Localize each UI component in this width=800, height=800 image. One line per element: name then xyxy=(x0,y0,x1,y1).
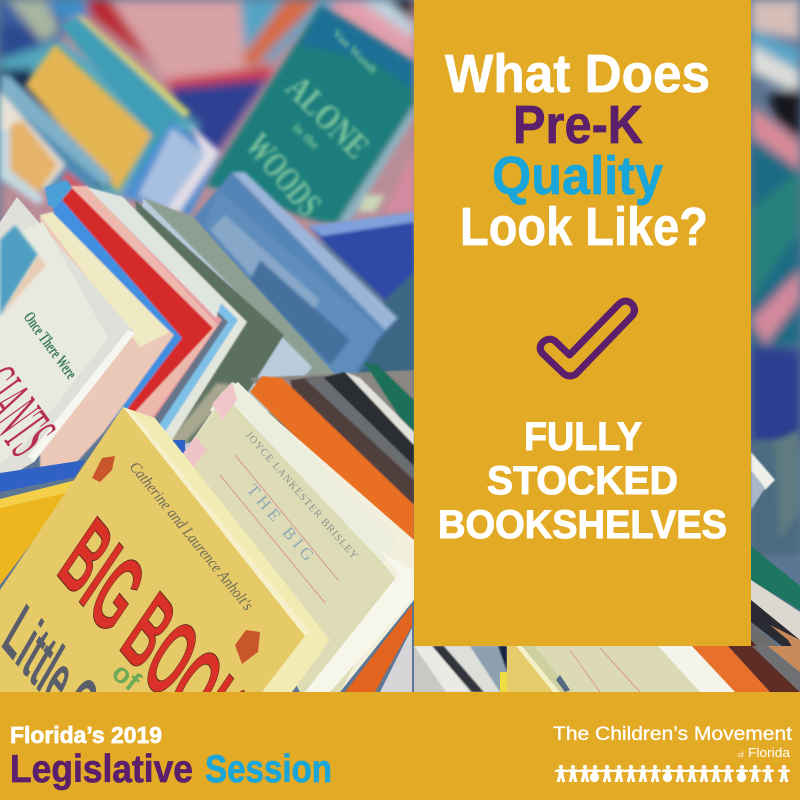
heading: What Does Pre-K Quality Look Like?: What Does xyxy=(445,44,710,104)
footer heading: Florida's 2019 Legislative Session: Florida’s 2019 xyxy=(10,722,162,748)
blue patterned book xyxy=(193,172,398,395)
stack of chevron spines, back to front xyxy=(40,180,345,474)
green book title xyxy=(247,28,378,218)
blue bin divider xyxy=(308,210,414,373)
author line: Catherine and Laurence Anholt's xyxy=(126,459,256,614)
title text on The Big: THE BIG xyxy=(243,480,318,565)
book: Once There Were Giants xyxy=(0,197,135,482)
logo: The Children's Movement of Florida: The Children’s Movement xyxy=(553,723,793,745)
callout: Fully Stocked Bookshelves: BOOKSHELVES xyxy=(438,503,727,547)
callout: Fully Stocked Bookshelves: STOCKED xyxy=(487,459,678,503)
heading: What Does Pre-K Quality Look Like? xyxy=(445,44,710,257)
blurred background books, upper left xyxy=(0,0,420,240)
green book title: ALONE xyxy=(278,67,377,166)
yellow, teal and blue spines at upper left xyxy=(0,15,220,215)
logo: The Children's Movement of Florida: Florida xyxy=(748,746,790,760)
books seen on right of panel xyxy=(751,0,800,445)
icon: check mark xyxy=(540,301,634,376)
green of: of xyxy=(106,656,147,697)
footer heading: Florida's 2019 Legislative Session xyxy=(10,722,332,791)
book: The Big xyxy=(172,382,414,692)
logo: The Children's Movement of Florida: of xyxy=(738,752,744,759)
footer heading: Florida's 2019 Legislative Session: Session xyxy=(205,748,332,791)
callout: Fully Stocked Bookshelves: FULLY xyxy=(524,415,642,459)
icon: paper-chain row of children xyxy=(555,765,790,782)
green book title: WOODS xyxy=(238,125,330,224)
footer heading: Florida's 2019 Legislative Session: Legislative xyxy=(10,748,193,791)
green book title: Van Wandt xyxy=(330,26,381,77)
logo: The Children's Movement of Florida xyxy=(553,723,793,782)
spines lower right of left column xyxy=(250,362,414,560)
small flame ornaments xyxy=(92,456,260,664)
callout: Fully Stocked Bookshelves xyxy=(438,415,727,547)
title text on The Big: JOYCE LANKESTER BRISLEY xyxy=(243,430,360,562)
strip of books visible beneath panel xyxy=(414,646,800,692)
heading: What Does Pre-K Quality Look Like?: Look Like? xyxy=(460,197,708,257)
panel: gold message column xyxy=(414,0,751,646)
blue and yellow bin at left xyxy=(0,460,85,585)
green book title: in the xyxy=(290,120,323,153)
panel: bottom footer band xyxy=(0,692,800,800)
book: Once There Were Giants: Once There Were xyxy=(20,308,81,383)
heading: What Does Pre-K Quality Look Like?: Quality xyxy=(492,146,663,206)
green book: Alone in the Woods xyxy=(205,6,414,224)
book: Big Book of Little Children xyxy=(0,407,330,692)
heading: What Does Pre-K Quality Look Like?: Pre-K xyxy=(513,95,643,155)
